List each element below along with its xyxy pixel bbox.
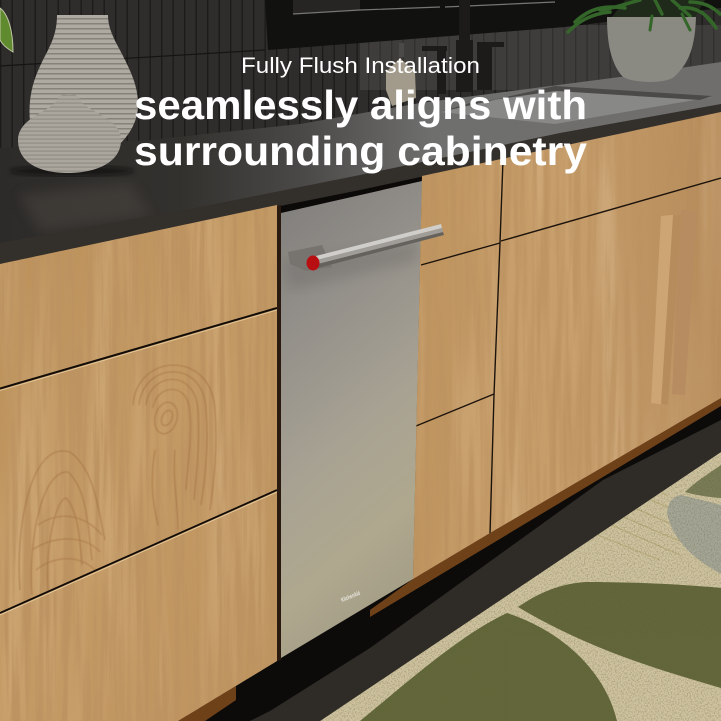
handle bar [312, 224, 444, 269]
leaf at top left [0, 8, 13, 52]
rug leaf: mid olive [518, 582, 721, 688]
door handle front [651, 214, 682, 405]
brand logo: KitchenAid [341, 591, 361, 604]
headline block [134, 53, 587, 174]
counter nosing [0, 104, 721, 264]
handle shadow [282, 240, 420, 290]
left cabinet fronts [0, 200, 278, 721]
window frame [265, 0, 721, 50]
handle bracket [288, 245, 332, 271]
floor [178, 405, 721, 721]
sink [440, 86, 712, 124]
counter highlight [20, 183, 150, 232]
fern front fronds [650, 12, 716, 30]
ribbed small vase [18, 94, 121, 173]
rug leaf: grey [667, 495, 721, 574]
toe kick wood [370, 398, 721, 617]
red handle cap [306, 256, 320, 270]
ribbed tall vase [30, 15, 138, 148]
door handle shading [661, 214, 682, 405]
toe kick shadow [178, 400, 721, 721]
soap dispenser [386, 43, 416, 106]
wood knot [19, 365, 216, 595]
fern foliage core [612, 0, 705, 17]
faucet [422, 0, 504, 94]
subtitle: Fully Flush Installation [241, 53, 480, 78]
dark gap beside appliance [277, 205, 281, 661]
drawer gaps [0, 308, 277, 615]
rug texture [320, 452, 721, 721]
right cabinet fronts [410, 110, 721, 590]
rug leaf: small olive [685, 465, 721, 498]
planter pot [607, 17, 696, 82]
left toe kick wood [178, 686, 236, 721]
shadow under counter [0, 106, 721, 272]
rug leaf: large olive [360, 613, 617, 721]
countertop [0, 62, 721, 250]
panel gaps [416, 160, 721, 534]
dishwasher handle [288, 224, 444, 271]
backsplash tile wall [0, 0, 721, 160]
fern fronds [568, 0, 720, 32]
headline line one: seamlessly aligns with [134, 82, 587, 128]
stainless steel appliance [281, 181, 422, 658]
vase shadow [10, 166, 134, 176]
rug [320, 452, 721, 721]
headline line two: surrounding cabinetry [134, 128, 587, 174]
rug woven stripes [596, 492, 681, 560]
door handle rear [672, 210, 697, 395]
